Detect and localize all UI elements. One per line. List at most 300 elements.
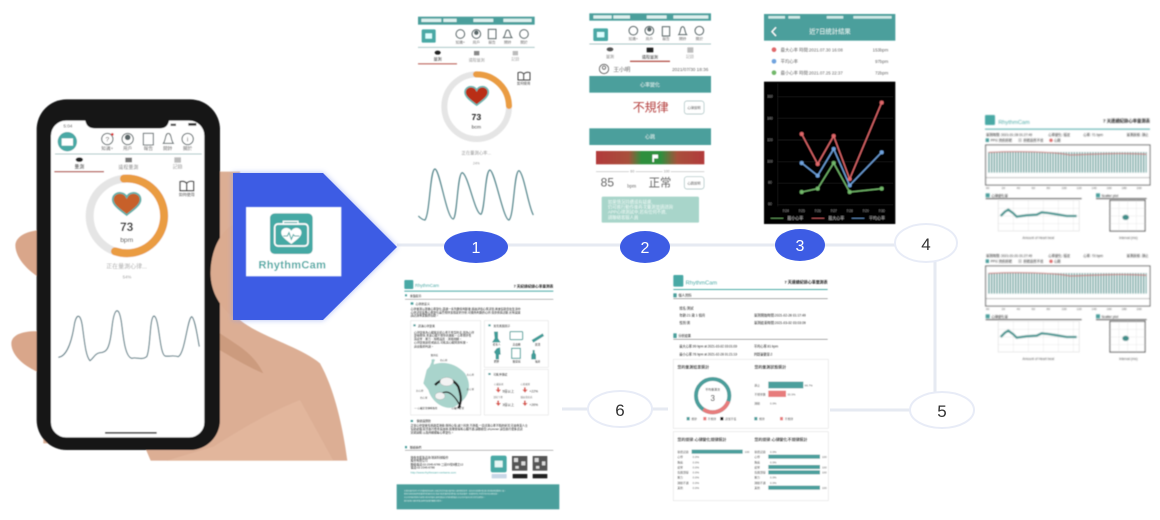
phone app navigation	[55, 132, 202, 154]
line chart: 7/29	[862, 209, 869, 213]
report info row: 量測狀態: 靜止	[1127, 253, 1149, 258]
legend rows: 最大心率 時間:2021.07.30 16:08	[781, 46, 843, 53]
risk factor panel: 飲酒	[535, 342, 541, 346]
complication panel: 心臟衰竭	[494, 382, 504, 386]
line chart: 140	[767, 116, 773, 120]
book icon	[518, 72, 530, 80]
user row	[599, 64, 709, 74]
chart legend: 平均心率	[869, 215, 885, 221]
report header	[404, 280, 554, 292]
heart illustration: 心臟不正常	[452, 406, 465, 410]
PPG strip chart: 20	[1002, 307, 1005, 311]
irregular bar chart: 0.0%	[770, 476, 777, 480]
step 2 screenshot: result	[589, 13, 711, 223]
book label: 如何使用	[179, 191, 195, 197]
heart rate variation chart	[986, 314, 1082, 361]
report info row: 量測時間: 2021-01-01 01:27:49	[986, 253, 1032, 258]
regular bar chart: 100	[745, 450, 750, 454]
book label: 如何使用	[517, 81, 530, 86]
regular bar chart: 0.0%	[693, 455, 700, 459]
risk factor panel: 肥胖	[494, 359, 500, 363]
unit: bcm	[472, 124, 481, 130]
risk factor panel	[484, 321, 548, 367]
heart diagram panel: 與疲勞、壓力、睡眠品質、運動相關。	[414, 337, 462, 341]
intro text: 心律量測以測量心率變化,還適一系列數值判斷後,藉由評估心率訊號,用來協助您在生活中	[411, 307, 521, 311]
recommendations: 定期追蹤,以及持續觀察心率變化。	[411, 430, 454, 434]
analysis summary: 最大心率:99 bpm at 2021-03-02 03:01:09	[679, 343, 737, 348]
app nav: 用戶	[646, 36, 653, 41]
heart rate header	[589, 128, 711, 145]
rate status: 正常	[649, 177, 671, 190]
irregular bar chart: 100	[822, 486, 827, 490]
results panel: 您的量測狀態統計	[754, 364, 786, 370]
heart illustration: 右心室	[420, 395, 428, 399]
personal data: 量測開始時間:2021-02-28 01:17:49	[754, 312, 806, 317]
regular bar chart: 0.0%	[693, 460, 700, 464]
irregular bar chart: 壓力	[754, 476, 760, 480]
chart legend: 最小心率	[787, 215, 803, 221]
PPG strip chart	[986, 145, 1150, 190]
irregular bar chart: 昏厥頭暈	[754, 471, 766, 475]
heart diagram panel	[411, 321, 481, 415]
complication panel: 心肌梗塞	[521, 382, 531, 386]
irregular bar chart: 0.0%	[770, 450, 777, 454]
regular bar chart: 0.0%	[693, 471, 700, 475]
rate scale	[596, 169, 704, 174]
personal data: 個人資料	[678, 293, 692, 298]
report header: RhythmCam	[415, 283, 439, 288]
report header: RhythmCam	[686, 281, 717, 287]
step 1 screenshot: measuring	[418, 17, 535, 220]
report header: 7 天連續紀錄心率量測表	[1103, 118, 1151, 125]
heart illustration	[414, 353, 475, 410]
regular bar chart: 昏厥頭暈	[677, 471, 689, 475]
complication panel: +22%	[529, 390, 538, 394]
complication panel: +26%	[529, 403, 538, 407]
rhythm button: 心律說明	[687, 105, 701, 110]
teal disclaimer footer: 本公司保留對報告內容進行修改的權利,使用者應自行判斷相關資訊,本公司不負任何形式的法律責任。	[404, 495, 486, 499]
heart illustration: — 心臟正常傳導路徑	[414, 406, 438, 410]
PPG strip chart: 200	[1137, 186, 1142, 190]
contact section	[405, 445, 553, 475]
personal data: 性別:男	[679, 320, 690, 325]
header: 近7日統計結果	[809, 27, 851, 36]
regular bar chart: 0.0%	[693, 481, 700, 485]
complication panel: 腦血管疾病	[521, 395, 533, 399]
report header: 7 天連續紀錄心率量測表	[784, 278, 828, 284]
intro text: 心律的意义	[416, 302, 430, 306]
regular bar chart: 0.0%	[693, 465, 700, 469]
report info row	[986, 253, 1149, 264]
app nav	[589, 26, 711, 44]
contact section: 聯絡電話:02-2345-6789 二段33號5樓之12	[411, 462, 464, 466]
intro text: 請諮詢專業醫師協助。	[411, 314, 439, 318]
regular bar chart: 疲勞	[677, 465, 683, 469]
status: 正在量測心率...	[462, 149, 491, 156]
PPG strip chart: 160	[1107, 186, 1112, 190]
app nav: 報告	[488, 39, 496, 44]
activity panel: 您的規律:心律變化不規律統計	[754, 436, 807, 442]
results legend: 訊號不佳	[725, 417, 736, 421]
PPG strip chart: 120	[1077, 186, 1082, 190]
heart diagram panel: 認識心律變異	[418, 324, 435, 328]
app nav: 知識+	[629, 36, 638, 41]
step 3 screenshot: 7-day statistics	[764, 14, 895, 224]
tabs: 記錄	[511, 56, 519, 62]
regular bar chart: 運動不適	[677, 481, 689, 485]
report info row: PPG 資訊訊號	[991, 259, 1013, 264]
PPG strip chart: 140	[1092, 186, 1097, 190]
phone tabs	[54, 157, 183, 172]
logo card	[246, 207, 341, 276]
rate unit: bpm	[627, 185, 636, 190]
scatter plot	[1096, 193, 1147, 240]
personal data: 量測結束時間:2021-03-02 03:03:09	[754, 320, 806, 325]
step badge 6	[588, 391, 652, 427]
report info row: 心率變化: 穩定	[1048, 132, 1071, 137]
teal disclaimer footer: 本報告僅供參考,不作為醫療診斷使用,本產品所提供資訊僅供個人健康管理參考。若有任何身體不適,請立即諮詢專業醫療人員。	[404, 488, 506, 492]
recommendations	[411, 419, 528, 434]
report info row: 心率變化: 穩定	[1048, 253, 1071, 258]
donut chart: 3	[710, 394, 715, 403]
teal disclaimer footer: 請注意個人資料保護,未經同意請勿轉載本報告。	[404, 498, 443, 502]
phone notch	[85, 119, 169, 128]
book icon	[180, 181, 194, 191]
legend rows: 72bpm	[875, 70, 889, 75]
heart rate variation chart: Amount of Heart beat	[1023, 357, 1054, 361]
note box: 仍可進行動作後再次量測並請諮詢	[608, 203, 674, 210]
phone screen	[51, 121, 204, 437]
results legend: 不規律	[708, 417, 716, 421]
app nav: 報告	[662, 36, 670, 41]
step badge 3	[775, 229, 825, 261]
app icon and store badges	[491, 456, 547, 478]
phone app navigation: 報告	[144, 145, 153, 152]
irregular bar chart: 疲勞	[754, 465, 760, 469]
status bars: 運動	[754, 401, 760, 405]
line chart: 120	[767, 138, 773, 142]
tabs: 量測	[434, 56, 442, 62]
app nav: 用戶	[473, 39, 480, 44]
analysis summary: 最小心率:76 bpm at 2021-02-28 01:21:19	[679, 352, 737, 357]
tabs: 遠程量測	[469, 56, 485, 62]
heart diagram panel: 請由醫師判讀。	[414, 344, 434, 348]
heart rate variation chart: Amount of Heart beat	[1023, 236, 1054, 240]
complication panel: 認知下降	[493, 395, 503, 399]
contact section: 股份有限公司	[411, 459, 428, 463]
PPG strip chart: 00	[986, 186, 990, 190]
PPG strip chart	[986, 266, 1150, 311]
step badge 6: 6	[615, 401, 625, 420]
phone tabs: 遠程量測	[118, 164, 138, 171]
scatter plot: Scatter plot	[1101, 315, 1118, 319]
report info row: 量測時間: 2021-01-28 01:27:49	[986, 132, 1032, 137]
measuring status: 正在量測心律...	[106, 262, 147, 270]
irregular bar chart: 其他	[754, 486, 760, 490]
note box	[602, 197, 699, 223]
progress percent: 54%	[123, 275, 131, 280]
report info row: 心跳	[1054, 138, 1061, 143]
heart illustration: 竇房結	[431, 353, 439, 357]
regular bar chart: 0.0%	[693, 476, 700, 480]
PPG strip chart: 100	[1062, 186, 1067, 190]
legend rows	[772, 46, 889, 76]
heart icon	[465, 87, 488, 105]
complication panel	[484, 369, 548, 415]
results legend: 不規律	[785, 417, 793, 421]
step badge 5	[910, 392, 974, 428]
app nav: 知識+	[456, 39, 465, 44]
heart diagram panel: 心律變異過低或過高,可能與心臟問題有關。	[414, 340, 469, 344]
line chart: 60	[768, 202, 772, 206]
report info row: 心跳	[1054, 259, 1061, 264]
max heart rate line	[800, 101, 884, 181]
irregular bar chart: 新增記錄	[754, 450, 766, 454]
results legend: 規律	[759, 417, 765, 421]
step badge 4: 4	[921, 235, 931, 254]
heart illustration: 左心室	[467, 387, 475, 391]
heart rate variation chart: 心律變化量	[991, 193, 1009, 198]
donut chart	[696, 379, 729, 412]
legend rows: 97bpm	[875, 59, 889, 64]
tabs: 量測	[606, 53, 614, 59]
complication panel: 3倍以上	[502, 402, 515, 407]
mean heart rate line	[800, 147, 884, 187]
report header	[673, 275, 828, 290]
recommendations: 保健與預防	[417, 419, 431, 423]
home indicator	[105, 432, 157, 434]
percent: 24%	[473, 161, 480, 165]
PPG waveform	[58, 311, 199, 361]
blue arrow panel	[233, 173, 397, 320]
note box: 請聯絡客服人員	[608, 214, 639, 221]
status bar	[418, 17, 535, 25]
step badge 5: 5	[937, 402, 947, 421]
rate gradient bar	[596, 151, 704, 164]
phone status bar	[63, 123, 196, 129]
rate value: 85	[601, 176, 614, 190]
report 5: summary page	[673, 275, 828, 501]
app nav: 關於	[696, 36, 703, 41]
phone body	[37, 99, 220, 450]
phone status bar: 5:04	[63, 124, 73, 129]
heart rate unit: bpm	[120, 237, 134, 244]
activity panel	[673, 432, 828, 501]
rate scale: 100	[664, 170, 670, 174]
irregular bar chart: 運動不適	[754, 481, 766, 485]
status bar	[589, 13, 711, 21]
analysis summary	[673, 333, 828, 357]
line chart: 7/25	[798, 209, 805, 213]
note box: APP心律測試中,若有任何不適,	[608, 209, 667, 216]
irregular bar chart: 胸痛	[754, 460, 760, 464]
PPG strip chart: 40	[1017, 307, 1020, 311]
heart illustration: 右心房	[440, 358, 448, 362]
step badge 3: 3	[796, 238, 805, 255]
step badge 1	[444, 231, 508, 263]
complication panel: 可能伴隨症	[493, 373, 508, 377]
recommendations: 正常心律變異包括適度運動,保持心情,減少刺激,不熬夜,一旦感覺心率不穩的狀況,可由專業人士	[411, 424, 528, 428]
results panel: 您的量測結果統計	[677, 364, 709, 370]
tabs: 遠程量測	[642, 54, 658, 60]
analysis summary: 平均心率:81 bpm	[754, 343, 778, 348]
irregular bar chart: 100	[822, 455, 827, 459]
heart icon	[113, 193, 141, 215]
PPG strip chart: 80	[1047, 307, 1050, 311]
arrow glow	[233, 173, 397, 320]
line chart: 7/24	[782, 209, 789, 213]
heart rhythm header: 心率變化	[640, 81, 660, 88]
contact section: 聯絡我們	[410, 445, 421, 449]
line chart: 7/26	[814, 209, 821, 213]
tabs	[606, 47, 694, 62]
heart illustration: 左心房	[467, 373, 475, 377]
scatter plot: Scatter plot	[1101, 194, 1118, 198]
report info row: 心率: 71 bpm	[1083, 132, 1103, 137]
progress ring	[444, 74, 509, 139]
app nav: 開鈴	[679, 36, 687, 41]
heart illustration: 左心房	[416, 389, 424, 393]
chart legend: 最大心率	[828, 215, 844, 221]
intro text	[411, 302, 521, 318]
irregular bar chart: 0.0%	[770, 481, 777, 485]
report info row: 量測狀態: 靜止	[1127, 132, 1149, 137]
risk factor panel: 常見風險因子	[493, 324, 510, 328]
report header: 7 天紀錄紀錄心率量測表	[514, 283, 554, 288]
rhythm button	[684, 101, 704, 114]
report info row: 訊號品質不佳	[1023, 138, 1044, 143]
status bars: 靜止	[754, 384, 760, 388]
contact section: http://www.rhythmcam-verisens.com	[411, 471, 457, 475]
report info row: PPG 資訊訊號	[991, 138, 1013, 143]
status bars: 33.3%	[787, 392, 796, 396]
line chart: 7/27	[830, 209, 837, 213]
note box: 如果情況持續或有疑慮,	[608, 198, 652, 205]
report info row: 訊號品質不佳	[1023, 259, 1044, 264]
recommendations: 協助處理,提早進行檢查與治療,如果覺得有心臟不適,請聯絡您 physician 請您進行更多資訊	[411, 427, 523, 431]
rate button: 心跳說明	[687, 180, 701, 185]
results panel	[673, 359, 828, 428]
status bars	[754, 382, 813, 405]
heart rate value: 73	[120, 220, 134, 234]
line chart: 100	[767, 159, 773, 163]
connector lines	[397, 245, 935, 410]
results legend	[687, 417, 793, 421]
PPG strip chart: 180	[1122, 186, 1127, 190]
legend rows: 平均心率	[781, 58, 799, 65]
heart rate variation chart: 心律變化量	[991, 314, 1009, 319]
report 4: first page	[985, 115, 1151, 240]
header	[764, 14, 895, 41]
irregular bar chart: 心悸	[754, 455, 760, 459]
status bars: 不規律數	[754, 392, 766, 396]
phone app navigation: 知識+	[101, 145, 114, 152]
PPG strip chart: 00	[986, 307, 990, 311]
activity panel: 您的規律:心律變化規律統計	[677, 436, 726, 442]
complication panel: 5倍以上	[502, 389, 515, 394]
waveform	[418, 169, 533, 220]
report info row: 心率: 73 bpm	[1083, 253, 1103, 258]
risk factor panel: 老年人	[493, 342, 501, 346]
heart diagram panel: 變動極快,會讓心臟不規律的跳動。心率規律性	[414, 334, 472, 338]
phone app navigation: 開鈴	[163, 145, 173, 152]
step badge 4	[895, 224, 957, 262]
tabs: 記錄	[686, 53, 694, 59]
progress ring	[90, 179, 164, 253]
analysis summary: 判斷筆數量:2	[754, 352, 773, 357]
report header	[985, 115, 1151, 130]
phone tabs: 記錄	[173, 163, 183, 170]
section heading: tips: 重點提示	[410, 294, 421, 298]
line chart: 80	[768, 181, 772, 185]
personal data: 年齡:21 歲 1 個月	[679, 312, 705, 317]
step badge 1: 1	[472, 240, 481, 257]
risk factor panel: 糖尿病	[513, 359, 521, 363]
PPG strip chart: 80	[1047, 186, 1050, 190]
tabs	[418, 51, 519, 64]
PPG strip chart: 40	[1017, 186, 1020, 190]
contact section: 技術支援及諮詢:瑞昇科技股份	[411, 455, 448, 459]
report 6: guidance page	[397, 280, 559, 509]
line chart: 160	[767, 94, 773, 98]
app nav	[418, 29, 535, 47]
photo: hand holding phone	[11, 99, 347, 461]
heart rate variation chart	[986, 193, 1082, 240]
contact section: 電話:02-2345-6789	[411, 466, 435, 470]
regular bar chart: 壓力	[677, 476, 683, 480]
irregular bar chart: 0.0%	[770, 460, 777, 464]
scatter plot	[1096, 314, 1147, 361]
report info row	[986, 132, 1149, 143]
regular bar chart: 新增記錄	[677, 450, 689, 454]
phone app navigation: 用戶	[123, 145, 132, 152]
PPG strip chart: 100	[1062, 307, 1067, 311]
regular bar chart: 其他	[677, 486, 683, 490]
min heart rate line	[800, 161, 884, 194]
PPG strip chart: 20	[1002, 186, 1005, 190]
app nav: 開鈴	[504, 39, 512, 44]
chart legend	[771, 215, 885, 221]
personal data	[673, 293, 828, 325]
rhythm result: 不規律	[633, 100, 669, 115]
teal disclaimer footer: 報告內容依據使用者量測所得資料分析,結果可能受量測環境影響,分析結果僅供一般健康評估,不得作為任何治療依據。	[404, 492, 499, 496]
user row: 王小明	[613, 65, 631, 73]
analysis summary: 分析結果	[678, 333, 692, 338]
irregular bar chart: 100	[822, 465, 827, 469]
status bars: 0.0%	[770, 401, 777, 405]
logo wordmark: RhythmCam	[258, 260, 326, 272]
regular bar chart	[677, 450, 750, 490]
line chart: 7/28	[846, 209, 853, 213]
value: 73	[472, 112, 481, 122]
PPG strip chart: 140	[1092, 307, 1097, 311]
hand and fingers	[11, 172, 347, 461]
phone tabs: 量測	[74, 164, 84, 171]
PPG strip chart: 200	[1137, 307, 1142, 311]
PPG strip chart: 160	[1107, 307, 1112, 311]
step badge 2: 2	[641, 240, 650, 257]
irregular bar chart: 100	[822, 471, 827, 475]
scatter plot: Interval (ms)	[1119, 357, 1138, 361]
regular bar chart: 心悸	[677, 455, 683, 459]
regular bar chart: 胸痛	[677, 460, 683, 464]
phone app navigation: i	[187, 136, 189, 143]
legend rows: 153bpm	[873, 47, 889, 52]
PPG strip chart: 60	[1032, 307, 1035, 311]
status bars: 66.7%	[805, 384, 813, 388]
rate button	[684, 177, 704, 189]
teal disclaimer footer	[397, 484, 559, 509]
